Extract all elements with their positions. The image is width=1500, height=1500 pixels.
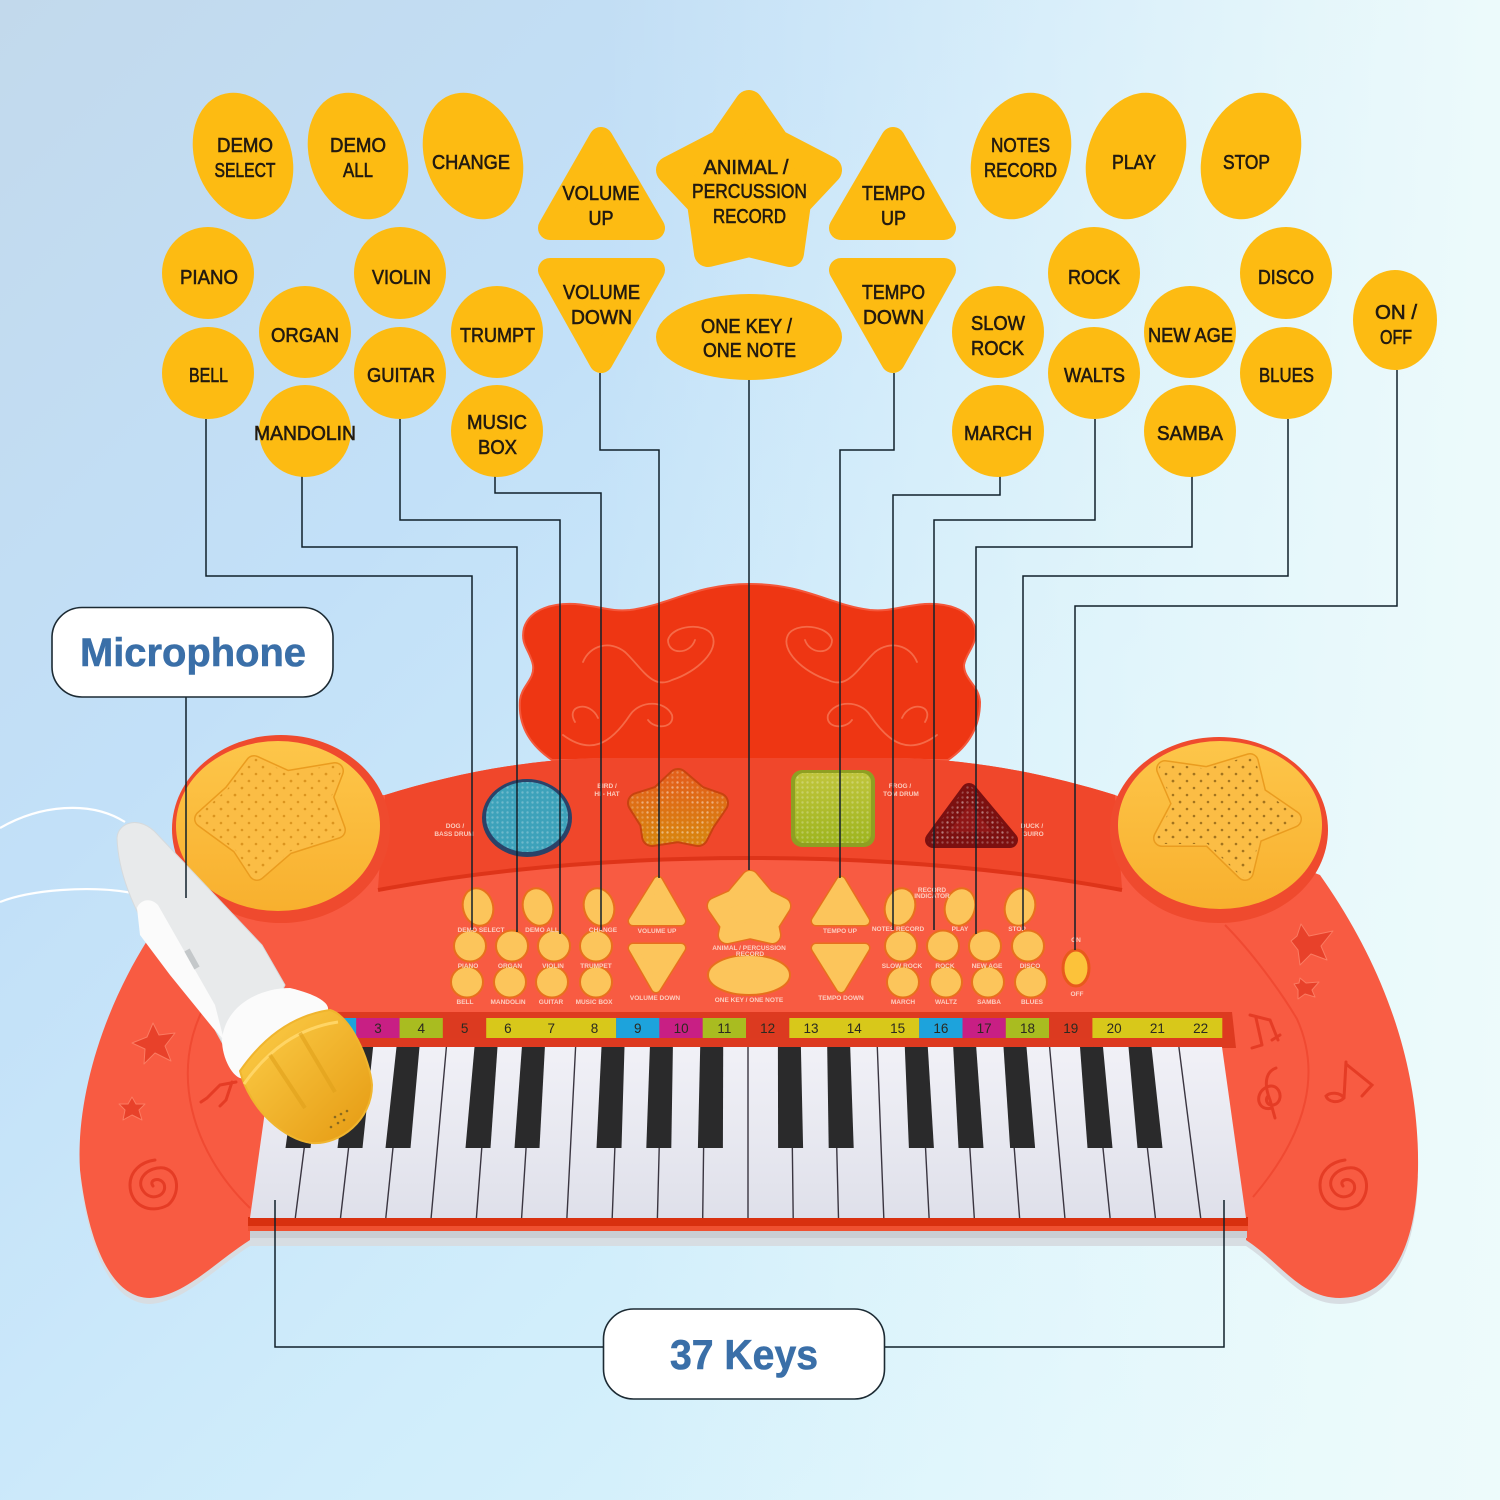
line: samba — [976, 476, 1192, 934]
button labels: ANIMAL / PERCUSSION — [712, 945, 786, 952]
button labels: MARCH — [891, 999, 915, 1006]
drum pad: right — [1110, 737, 1328, 923]
callout: demo all: ALL — [343, 160, 373, 182]
button labels: SAMBA — [977, 999, 1001, 1006]
button labels: OFF — [1070, 991, 1084, 998]
line: waltz — [934, 419, 1095, 930]
callout: march — [952, 385, 1044, 477]
line: march — [893, 476, 1000, 930]
button labels: MUSIC BOX — [576, 999, 613, 1006]
right music note — [1326, 1062, 1372, 1102]
callout: animal percussion record: RECORD — [713, 206, 786, 228]
number strip: 18 — [1020, 1021, 1035, 1036]
callout: change — [406, 79, 540, 233]
button labels: PIANO — [458, 963, 478, 970]
number strip: 19 — [1063, 1021, 1078, 1036]
callout: volume down: DOWN — [571, 307, 632, 329]
volume and tempo buttons — [633, 881, 865, 988]
line: tempo down — [840, 373, 894, 878]
front lip — [248, 1217, 1248, 1238]
callout: volume up: VOLUME — [562, 183, 640, 205]
callout: bell: BELL — [189, 365, 228, 387]
white key separators — [295, 1047, 1201, 1218]
line: bell — [206, 419, 472, 930]
number strip — [270, 1018, 1222, 1038]
number strip: 5 — [461, 1021, 468, 1036]
callout: notes record — [954, 79, 1088, 233]
callout: new age: NEW AGE — [1148, 325, 1233, 347]
callout: play: PLAY — [1112, 152, 1156, 174]
button labels: NEW AGE — [972, 963, 1003, 970]
light labels: DUCK / — [1021, 823, 1043, 830]
number strip: 3 — [374, 1021, 382, 1036]
callout: rock: ROCK — [1068, 267, 1121, 289]
button labels: DEMO ALL — [525, 927, 559, 934]
callout: violin: VIOLIN — [372, 267, 431, 289]
callout: tempo up: UP — [881, 208, 906, 230]
microphone neck — [222, 988, 328, 1078]
number strip: 21 — [1150, 1021, 1165, 1036]
button labels: TEMPO UP — [823, 928, 858, 935]
callout: guitar — [354, 327, 446, 419]
number strip: 7 — [547, 1021, 555, 1036]
microphone head — [240, 1010, 372, 1143]
microphone label — [52, 608, 333, 898]
button labels — [457, 887, 1084, 1006]
keys label: 37 Keys — [670, 1331, 818, 1378]
callout: volume down: VOLUME — [563, 282, 640, 304]
light labels: BIRD / — [597, 783, 617, 790]
microphone head ridges — [270, 1033, 335, 1108]
callout: samba — [1144, 385, 1236, 477]
right big star — [1291, 924, 1333, 965]
number strip: 6 — [504, 1021, 512, 1036]
number strip: 11 — [717, 1021, 731, 1036]
light: orange star — [638, 779, 718, 836]
button labels: VOLUME UP — [638, 928, 677, 935]
music stand — [520, 584, 980, 760]
button labels: SLOW ROCK — [882, 963, 923, 970]
control buttons — [451, 879, 1089, 1006]
microphone holes — [330, 1110, 348, 1128]
callout: organ: ORGAN — [271, 325, 339, 347]
number strip: 16 — [933, 1021, 948, 1036]
callout: tempo down: DOWN — [863, 307, 924, 329]
callout: tempo up: TEMPO — [862, 183, 925, 205]
callout: notes record: NOTES — [991, 135, 1050, 157]
number strip: 14 — [847, 1021, 862, 1036]
light: blue circle — [482, 779, 572, 857]
callout: mandolin: MANDOLIN — [254, 423, 356, 445]
line: guitar — [400, 419, 560, 934]
callout: animal percussion record: PERCUSSION — [692, 181, 807, 203]
callout: play — [1069, 79, 1203, 233]
callout: march: MARCH — [964, 423, 1032, 445]
line: blues — [1023, 419, 1288, 930]
callout: demo select: DEMO — [217, 135, 273, 157]
number strip: 17 — [977, 1021, 992, 1036]
callout: disco — [1240, 227, 1332, 319]
callout: volume up — [550, 139, 653, 230]
button labels: TEMPO DOWN — [818, 995, 864, 1002]
button labels: BLUES — [1021, 999, 1044, 1006]
microphone — [0, 808, 372, 1143]
callout: tempo down: TEMPO — [862, 282, 925, 304]
star button — [716, 879, 782, 935]
callout: volume up: UP — [588, 208, 614, 230]
button labels: ONE KEY / ONE NOTE — [715, 997, 784, 1004]
callout: slow rock: SLOW — [971, 313, 1025, 335]
button labels: STOP — [1008, 926, 1026, 933]
callout: slow rock — [952, 286, 1044, 378]
button labels: INDICATOR — [914, 893, 950, 900]
number strip: 15 — [890, 1021, 905, 1036]
button labels: GUITAR — [539, 999, 564, 1006]
callout: one key one note: ONE NOTE — [703, 340, 796, 362]
callout: music box: MUSIC — [467, 412, 527, 434]
right small star — [1294, 978, 1319, 999]
callout: samba: SAMBA — [1157, 423, 1224, 445]
callout: music box: BOX — [478, 437, 517, 459]
callout: violin — [354, 227, 446, 319]
light buttons — [434, 770, 1044, 857]
callout: demo all — [291, 79, 425, 233]
callout: waltz: WALTS — [1064, 365, 1125, 387]
callout: music box — [451, 385, 543, 477]
callout: demo all: DEMO — [330, 135, 386, 157]
line: mandolin — [302, 476, 517, 932]
upper panel — [378, 758, 1122, 888]
button labels: ROCK — [935, 963, 955, 970]
drum pad: left — [172, 735, 390, 923]
left spiral — [130, 1160, 177, 1209]
callout: tempo up — [841, 139, 944, 230]
number strip frame — [262, 1012, 1236, 1048]
callout: stop — [1184, 79, 1318, 233]
callout: blues: BLUES — [1259, 365, 1314, 387]
callout: waltz — [1048, 327, 1140, 419]
line: music box — [495, 476, 601, 930]
callout: bell — [162, 327, 254, 419]
callout: demo select — [176, 79, 310, 233]
button labels: RECORD — [918, 887, 946, 894]
callout: demo select: SELECT — [214, 160, 276, 182]
number strip: 20 — [1107, 1021, 1122, 1036]
body shell — [80, 758, 1418, 1298]
button labels: CHANGE — [589, 927, 618, 934]
number strip: 9 — [634, 1021, 642, 1036]
light labels: GUIRO — [1022, 831, 1044, 838]
callout: new age — [1144, 286, 1236, 378]
number strip: 8 — [591, 1021, 598, 1036]
callout: animal percussion record — [670, 104, 828, 253]
right spiral — [1320, 1160, 1367, 1209]
callout: trumpet: TRUMPT — [460, 325, 535, 347]
line: keys left — [275, 1200, 603, 1347]
button labels: ORGAN — [498, 963, 522, 970]
top row oval buttons — [459, 885, 1039, 929]
button labels: WALTZ — [935, 999, 957, 1006]
callout: on off: ON / — [1375, 302, 1417, 324]
lobe arc left — [188, 1005, 250, 1208]
lobe arc right — [1225, 925, 1308, 1197]
number strip: 10 — [674, 1021, 689, 1036]
callout: piano — [162, 227, 254, 319]
callout: one key one note: ONE KEY / — [701, 316, 792, 338]
callout: on off: OFF — [1380, 327, 1412, 349]
upper panel ridge — [378, 858, 1122, 890]
light labels: DOG / — [446, 823, 464, 830]
button labels: MANDOLIN — [490, 999, 526, 1006]
light: green square — [791, 770, 875, 847]
callout: tempo down — [841, 270, 944, 361]
microphone label: Microphone — [80, 631, 306, 675]
callout: notes record: RECORD — [984, 160, 1057, 182]
keyboard body — [80, 758, 1418, 1304]
button labels: RECORD — [736, 951, 764, 958]
embossed decorations — [119, 924, 1372, 1209]
treble clef — [1259, 1068, 1280, 1118]
callout: mandolin — [254, 385, 356, 477]
line: volume down — [600, 373, 659, 878]
callout: volume down — [550, 270, 653, 361]
microphone cords — [0, 808, 132, 902]
callout: slow rock: ROCK — [971, 338, 1025, 360]
light: red triangle — [933, 791, 1010, 840]
button labels: NOTES RECORD — [872, 926, 924, 933]
black keys — [286, 1047, 1162, 1148]
number strip: 13 — [803, 1021, 819, 1036]
leader lines — [206, 370, 1397, 1347]
light labels: FROG / — [889, 783, 911, 790]
callout: animal percussion record: ANIMAL / — [704, 157, 789, 179]
callout: change: CHANGE — [432, 152, 510, 174]
callout: blues — [1240, 327, 1332, 419]
callout: on off — [1353, 270, 1437, 370]
light labels: TOM DRUM — [883, 791, 919, 798]
light labels — [434, 783, 1044, 838]
right music notes — [1250, 1015, 1280, 1048]
button labels: VIOLIN — [542, 963, 564, 970]
microphone handle — [117, 823, 285, 1075]
callout: piano: PIANO — [180, 267, 238, 289]
callout: one key one note — [656, 294, 842, 380]
callout: trumpet — [451, 286, 543, 378]
body underside shadow — [80, 1176, 1418, 1304]
callout: disco: DISCO — [1258, 267, 1314, 289]
button labels: DISCO — [1020, 963, 1040, 970]
white keys — [250, 1047, 1246, 1218]
line: keys right — [885, 1200, 1224, 1347]
left big star — [132, 1023, 175, 1064]
button labels: VOLUME DOWN — [630, 995, 680, 1002]
left small star — [119, 1097, 145, 1120]
number strip: 12 — [760, 1021, 775, 1036]
microphone clip — [137, 900, 224, 1040]
callout: rock — [1048, 227, 1140, 319]
line: on off — [1075, 370, 1397, 950]
number strip: 4 — [418, 1021, 426, 1036]
callout: organ — [259, 286, 351, 378]
button labels: TRUMPET — [580, 963, 612, 970]
line: one key one note — [748, 380, 750, 870]
on off switch — [1063, 950, 1089, 986]
callout: stop: STOP — [1223, 152, 1270, 174]
keyboard keys — [248, 1012, 1248, 1238]
light labels: BASS DRUM — [434, 831, 474, 838]
button labels: BELL — [457, 999, 474, 1006]
one key oval button — [708, 955, 790, 995]
button labels: ON — [1071, 937, 1081, 944]
number strip: 22 — [1193, 1021, 1208, 1036]
left music notes — [201, 1082, 236, 1106]
light labels: HI - HAT — [594, 791, 620, 798]
button labels: PLAY — [952, 926, 969, 933]
keys label — [604, 1309, 884, 1399]
callout: guitar: GUITAR — [367, 365, 435, 387]
microphone slot — [187, 950, 197, 968]
microphone head rim — [244, 1022, 338, 1084]
instrument and rhythm buttons — [451, 930, 1047, 998]
button labels: DEMO SELECT — [458, 927, 505, 934]
